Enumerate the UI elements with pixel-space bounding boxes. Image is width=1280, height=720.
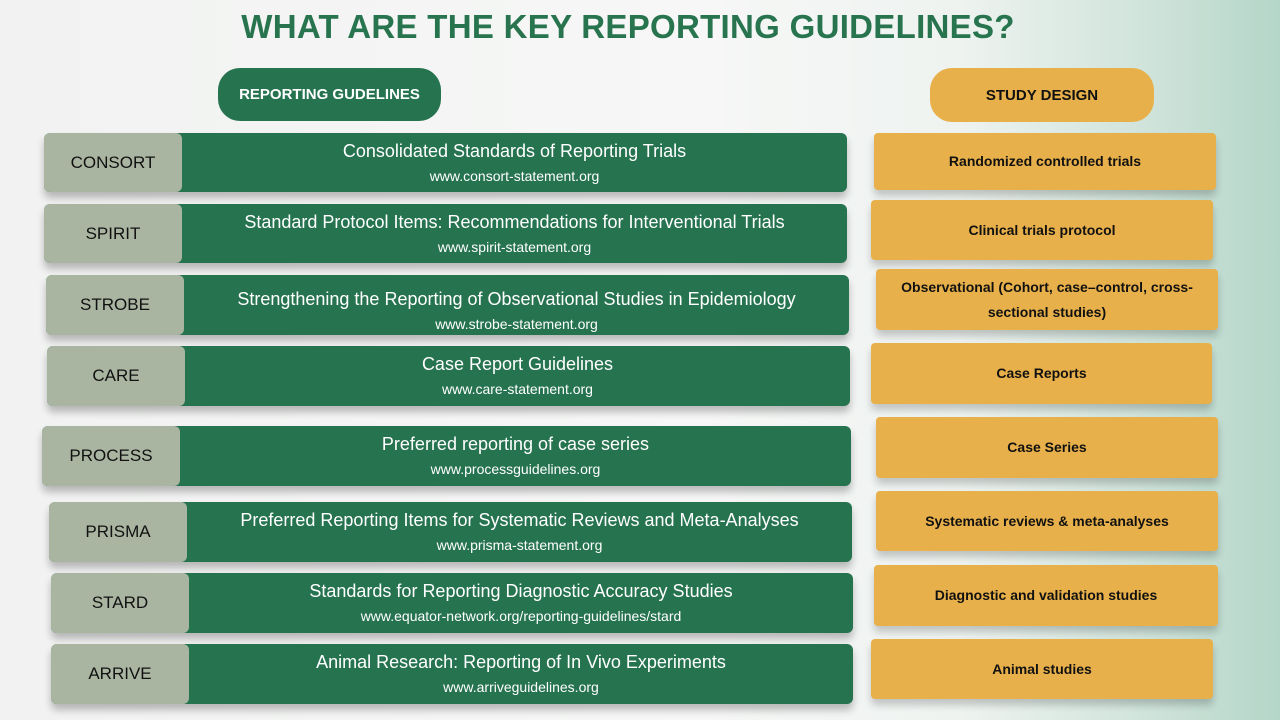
study design: diagnostic: Diagnostic and validation studies xyxy=(935,587,1157,603)
row: CARE: www.care-statement.org xyxy=(442,381,593,397)
study design: systematic reviews: Systematic reviews & meta-analyses xyxy=(925,512,1169,528)
row: STROBE xyxy=(46,275,849,335)
row: CONSORT: www.consort-statement.org xyxy=(430,168,599,184)
study design: case reports xyxy=(871,343,1212,404)
row: PRISMA: PRISMA xyxy=(85,522,151,541)
row: STARD: STARD xyxy=(92,593,148,612)
study design: animal xyxy=(871,639,1213,699)
row: PROCESS: Preferred reporting of case series xyxy=(382,434,649,454)
row: STARD xyxy=(51,573,853,633)
row: CONSORT xyxy=(44,133,847,192)
row: SPIRIT: Standard Protocol Items: Recommendations for Interventional Trials xyxy=(244,212,785,232)
row: CARE: CARE xyxy=(92,366,140,385)
row: ARRIVE: ARRIVE xyxy=(88,664,152,683)
study design: RCT xyxy=(874,133,1216,190)
row: ARRIVE: Animal Research: Reporting of In Vivo Experiments xyxy=(316,652,726,672)
header: reporting guidelines: REPORTING GUDELINES xyxy=(239,86,420,103)
row: SPIRIT: www.spirit-statement.org xyxy=(438,239,591,255)
row: PROCESS: PROCESS xyxy=(69,446,153,465)
row: CONSORT: CONSORT xyxy=(71,152,155,172)
row: STARD: Standards for Reporting Diagnostic Accuracy Studies xyxy=(309,581,733,601)
row: CARE: Case Report Guidelines xyxy=(422,354,613,374)
row: SPIRIT xyxy=(44,204,847,263)
study design: case series xyxy=(876,417,1218,478)
row: PROCESS: www.processguidelines.org xyxy=(431,461,600,477)
study design: systematic reviews xyxy=(876,491,1218,551)
study design: animal: Animal studies xyxy=(992,660,1092,676)
row: STROBE: Strengthening the Reporting of Observational Studies in Epidemiology xyxy=(237,289,796,309)
header: reporting guidelines xyxy=(218,68,441,121)
row: CONSORT: Consolidated Standards of Reporting Trials xyxy=(343,141,686,161)
study design: diagnostic xyxy=(874,565,1218,626)
header: study design: STUDY DESIGN xyxy=(986,86,1098,104)
study design: observational xyxy=(876,269,1218,330)
row: PRISMA xyxy=(49,502,852,562)
row: ARRIVE: www.arriveguidelines.org xyxy=(443,679,599,695)
row: PRISMA: Preferred Reporting Items for Systematic Reviews and Meta-Analyses xyxy=(240,510,799,530)
title: WHAT ARE THE KEY REPORTING GUIDELINES? xyxy=(241,8,1015,45)
study design: RCT: Randomized controlled trials xyxy=(949,153,1141,169)
row: PROCESS xyxy=(42,426,851,486)
row: STROBE: www.strobe-statement.org xyxy=(435,316,598,332)
row: STROBE: STROBE xyxy=(80,295,150,314)
study design: case series: Case Series xyxy=(1007,439,1087,455)
row: CARE xyxy=(47,346,850,406)
row: SPIRIT: SPIRIT xyxy=(86,224,140,242)
row: ARRIVE xyxy=(51,644,853,704)
row: STARD: www.equator-network.org/reporting-guidelines/stard xyxy=(361,608,681,624)
study design: case reports: Case Reports xyxy=(996,365,1087,381)
header: study design xyxy=(930,68,1154,122)
study design: protocol xyxy=(871,200,1213,260)
row: PRISMA: www.prisma-statement.org xyxy=(437,537,602,553)
study design: protocol: Clinical trials protocol xyxy=(968,222,1116,238)
study design: observational: Observational (Cohort, case–control, cross-sectional studies) xyxy=(901,278,1193,320)
